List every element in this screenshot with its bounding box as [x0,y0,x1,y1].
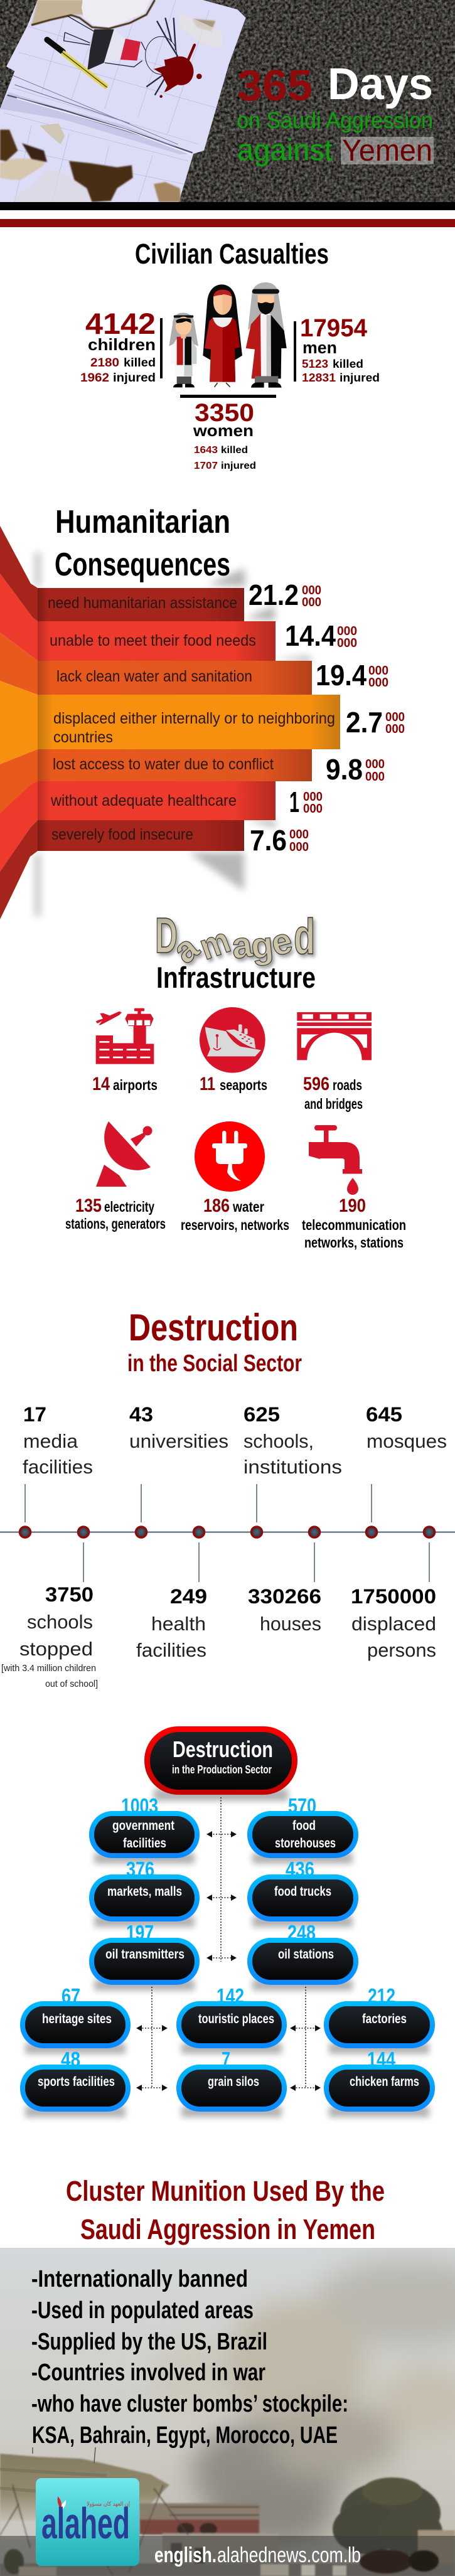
ribbon figures: 000 [337,624,357,638]
panel: casualties figures and counts [80,282,380,471]
timeline labels above: mosques [367,1430,447,1452]
heading: damaged infrastructure: e [267,919,297,965]
ribbon labels: lost access to water due to conflict [53,756,274,773]
infrastructure counts: networks, stations [304,1234,404,1251]
icon: airport [96,1008,154,1064]
heading: destruction in the social sector: in the Social Sector [127,1350,302,1377]
pill counts: 144 [367,2048,396,2071]
women count: killed [221,445,248,456]
infrastructure counts: airports [113,1077,158,1093]
infrastructure counts: 135 [75,1195,102,1216]
women count: 3350 [195,399,254,427]
men count: 5123 [302,358,328,370]
icon: electric plug [195,1121,265,1192]
heading: cluster munition: Saudi Aggression in Yemen [80,2213,375,2245]
pill counts: 570 [288,1794,316,1817]
pill: heritage sites [20,2001,131,2048]
children count: injured [113,371,156,385]
women count: women [193,421,254,440]
pill: touristic places: touristic places [198,2012,274,2026]
pill: touristic places [176,2001,287,2048]
timeline labels below: health [151,1613,206,1635]
women count: 1707 [194,461,218,471]
heading: civilian casualties: Civilian Casualties [135,238,329,270]
pill: factories: factories [362,2012,407,2026]
ribbon labels: lack clean water and sanitation [56,668,252,685]
heading: cluster munition [66,2175,385,2245]
title [237,60,434,168]
ribbon figures: 21.2 [249,579,299,611]
pill: markets, malls [89,1874,200,1921]
cluster munition facts: -Used in populated areas [31,2297,254,2324]
heading: humanitarian consequences [55,504,230,583]
ribbon figures: 000 [385,722,405,736]
infrastructure counts: reservoirs, networks [181,1217,289,1233]
ribbon figures: 000 [303,790,323,804]
pill counts: 248 [287,1921,316,1944]
website url: english. [154,2543,217,2567]
children count: 4142 [85,307,156,340]
icon: logo flame [58,2496,66,2510]
children count: 1962 [80,371,109,385]
men count [294,314,380,384]
children count: children [88,335,156,354]
main pill: destruction in the production sector: Destruction [173,1736,273,1762]
children count: killed [124,356,156,370]
title: Yemen [342,134,432,168]
infrastructure counts [65,1074,406,1251]
ribbon figures: 000 [368,664,388,678]
ribbon figures: 7.6 [250,824,287,857]
ribbon labels [48,594,335,843]
heading: destruction in the social sector: Destruction [129,1307,298,1349]
bottom strip [0,2536,455,2576]
ribbon figures: 9.8 [326,753,363,786]
infrastructure counts: seaports [220,1077,267,1093]
pill counts: 1003 [121,1794,158,1817]
pill counts: 212 [368,1984,395,2007]
heading: destruction in the social sector [127,1307,302,1377]
main pill: destruction in the production sector: in the Production Sector [172,1763,272,1776]
flag stripes [0,202,455,227]
men count: men [302,338,337,357]
timeline labels below: out of school] [45,1679,98,1689]
timeline labels above [23,1403,447,1478]
pill: chicken farms: chicken farms [350,2075,419,2089]
timeline labels below: persons [367,1639,436,1661]
pill: factories [324,2001,435,2048]
timeline labels above: 625 [244,1403,280,1426]
ribbon labels: countries [53,729,113,746]
cluster munition facts: KSA, Bahrain, Egypt, Morocco, UAE [32,2422,338,2449]
cluster munition facts: -Internationally banned [31,2266,248,2292]
timeline labels below: displaced [351,1613,436,1635]
heading: cluster munition: Cluster Munition Used By the [66,2175,385,2207]
timeline labels below: houses [260,1613,321,1635]
heading: damaged infrastructure: a [165,927,207,971]
pill: heritage sites: heritage sites [42,2012,112,2026]
pill counts [61,1794,396,2071]
children count [80,307,163,385]
pill: government facilities: government [112,1819,174,1833]
website url [154,2543,361,2567]
ribbon labels: severely food insecure [51,826,193,843]
pill: sports facilities: sports facilities [38,2075,115,2089]
ribbon figures: 14.4 [285,619,336,652]
infrastructure counts: 11 [200,1074,215,1094]
ribbon labels: need humanitarian assistance [48,594,237,612]
timeline labels below: [with 3.4 million children [1,1663,96,1674]
ribbon figures: 000 [365,770,385,784]
logo: alahed [36,2478,139,2566]
pill: food storehouses: food [292,1819,316,1833]
heading: humanitarian consequences: Humanitarian [55,504,230,540]
infrastructure counts: stations, generators [65,1216,166,1232]
icon: water tap [309,1125,362,1195]
cluster munition facts: -Countries involved in war [31,2360,265,2386]
women count: injured [221,461,256,471]
paper with burnt edges and child drawing [0,0,246,202]
icon: family figures [169,282,287,388]
pill: oil transmitters [89,1938,200,1985]
ribbon figures: 000 [289,828,309,842]
pill counts: 67 [62,1984,80,2007]
heading: damaged infrastructure: a [229,924,255,967]
women count: 1643 [194,445,218,456]
ribbon figures: 000 [289,840,309,854]
pill: government facilities: facilities [123,1836,166,1851]
infrastructure counts: 596 [303,1074,329,1094]
pill counts: 376 [126,1857,154,1881]
timeline labels below [1,1583,436,1689]
heading: damaged infrastructure: m [194,919,235,968]
pill: food trucks [247,1874,358,1921]
pill: oil transmitters: oil transmitters [105,1947,185,1962]
timeline labels below: 1750000 [351,1585,436,1608]
ribbon figures [249,579,405,857]
timeline labels above: 17 [23,1403,46,1426]
title: Days [328,60,433,109]
pill: markets, malls: markets, malls [107,1884,182,1899]
title: against [237,133,333,166]
pill counts: 436 [286,1857,314,1881]
cluster munition facts: -Supplied by the US, Brazil [31,2329,267,2355]
timeline labels above: 645 [366,1403,402,1426]
icon: bridge [297,1012,372,1060]
icon: satellite dish [96,1121,152,1187]
ribbon labels: unable to meet their food needs [50,632,256,649]
panel: humanitarian consequences ribbons [0,526,340,919]
timeline labels below: stopped [19,1638,93,1660]
timeline labels above: media [23,1430,78,1452]
timeline labels above: facilities [23,1456,93,1478]
children count: 2180 [90,356,119,370]
icon: seaport ship [200,1007,265,1073]
panel: header photo [0,0,455,202]
ribbon figures: 000 [303,802,323,816]
ribbon figures: 2.7 [346,706,383,739]
pill: food storehouses [247,1811,358,1858]
timeline labels above: 43 [129,1403,153,1426]
heading: damaged infrastructure: d [294,908,315,965]
infrastructure counts: and bridges [304,1096,363,1112]
infrastructure counts: 186 [203,1195,230,1216]
men count: 17954 [300,314,368,342]
ribbon figures: 000 [385,710,405,724]
timeline: social sector [0,1403,455,1689]
men count: killed [333,358,363,370]
pill: food trucks: food trucks [274,1884,331,1899]
infrastructure counts: water [232,1199,264,1215]
pill: government facilities [89,1811,200,1858]
pill: grain silos: grain silos [208,2075,259,2089]
infrastructure counts: 14 [92,1074,110,1094]
infrastructure counts: electricity [104,1199,154,1215]
pill counts: 7 [222,2048,230,2071]
heading: damaged infrastructure: D [155,908,178,964]
cluster munition facts [31,2266,348,2449]
main pill: destruction in the production sector [144,1726,297,1795]
ribbon figures: 1 [289,786,299,818]
ribbon figures: 19.4 [316,659,367,692]
connectors [136,1797,321,2091]
timeline labels above: universities [129,1430,228,1452]
ribbon labels: displaced either internally or to neighboring [53,710,335,727]
timeline labels above: institutions [244,1456,342,1478]
ribbon figures: 000 [302,584,321,597]
heading: humanitarian consequences: Consequences [55,547,230,583]
pill counts: 197 [126,1921,154,1944]
timeline labels below: 249 [170,1585,207,1608]
pill: food storehouses: storehouses [275,1836,336,1851]
pill: grain silos [176,2065,287,2112]
timeline labels below: schools [27,1611,93,1633]
heading: damaged infrastructure: Infrastructure [156,961,316,994]
ribbon figures: 000 [365,757,385,771]
heading: damaged infrastructure [155,908,316,994]
pill: oil stations [247,1938,358,1985]
infrastructure counts: telecommunication [302,1217,406,1233]
pill counts: 142 [217,1984,244,2007]
timeline labels below: facilities [136,1639,206,1661]
website url: alahednews.com.lb [217,2543,361,2567]
title: 365 [237,61,313,110]
heading: damaged infrastructure: g [249,924,276,967]
panel: production sector diagram [20,1726,435,2117]
logo: alahed: alahed [41,2499,130,2548]
ribbon figures: 000 [302,596,321,609]
cluster munition facts: -who have cluster bombs’ stockpile: [31,2391,348,2417]
timeline labels below: 330266 [248,1585,321,1608]
pill: sports facilities [20,2065,131,2112]
men count: injured [340,371,380,384]
panel: smoke photo [0,2248,455,2576]
ribbon figures: 000 [337,636,357,650]
infrastructure counts: roads [333,1077,362,1093]
title: on Saudi Aggression [237,107,433,133]
pill counts: 48 [61,2048,80,2071]
infrastructure counts: 190 [339,1195,366,1216]
men count: 12831 [302,371,336,384]
ribbon figures: 000 [368,676,388,690]
timeline labels above: schools, [244,1430,314,1452]
women count [180,395,276,471]
timeline labels below: 3750 [45,1583,94,1606]
ribbon labels: without adequate healthcare [50,792,237,810]
pill: oil stations: oil stations [278,1947,334,1962]
pill: chicken farms [324,2065,435,2112]
logo: alahed: إن العهد كان مسؤولا [87,2501,130,2508]
